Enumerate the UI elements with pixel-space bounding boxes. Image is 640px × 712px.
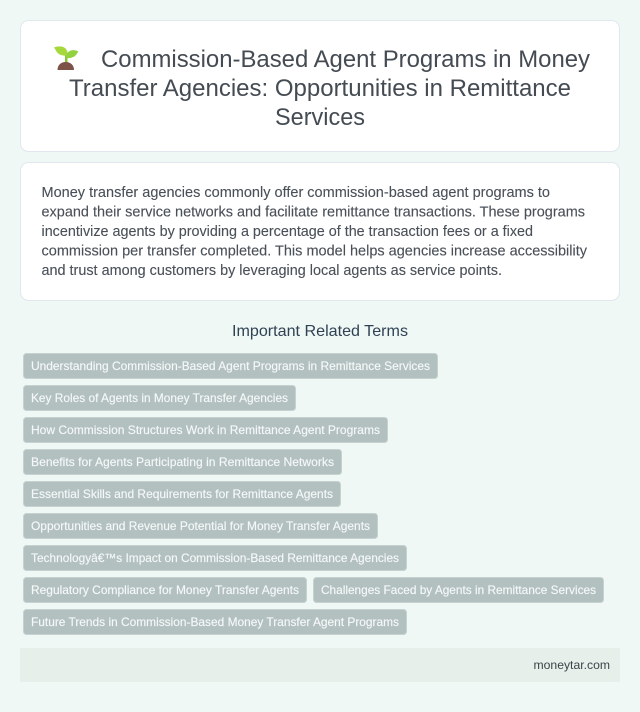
title: Transfer Agencies: Opportunities in Remittance — [69, 75, 571, 102]
tag 4 — [24, 450, 342, 474]
tag 1 — [24, 354, 438, 378]
tag 3 — [24, 418, 388, 442]
panel: title card — [20, 20, 620, 152]
text block: description: Money transfer agencies commonly offer commission-based agent programs to — [42, 184, 550, 201]
icon: seedling — [54, 46, 78, 70]
tag 7: Technologyâ€™s Impact on Commission-Based Remittance Agencies — [31, 551, 399, 565]
panel: description — [20, 162, 620, 300]
text block: description — [42, 184, 587, 279]
text block: description: expand their service networks and facilitate remittance transactions. These programs — [42, 204, 585, 220]
tag 4: Benefits for Agents Participating in Remittance Networks — [31, 455, 334, 469]
tag list — [24, 354, 604, 634]
tag 10 — [24, 610, 406, 634]
title: Commission-Based Agent Programs in Money — [101, 46, 590, 73]
tag 8 — [24, 578, 306, 602]
tag 7 — [24, 546, 406, 570]
text block: description: and trust among customers by leveraging local agents as service points. — [42, 262, 502, 279]
heading: related terms: Important Related Terms — [232, 323, 408, 340]
tag 1: Understanding Commission-Based Agent Programs in Remittance Services — [31, 359, 430, 373]
text block: description: incentivize agents by providing a percentage of the transaction fees or a fixed — [42, 223, 533, 240]
tag 3: How Commission Structures Work in Remittance Agent Programs — [31, 423, 380, 437]
tag 5: Essential Skills and Requirements for Remittance Agents — [31, 487, 333, 501]
tag 9 — [314, 578, 604, 602]
footer — [20, 648, 620, 682]
tag 2: Key Roles of Agents in Money Transfer Agencies — [31, 391, 288, 405]
tag 5 — [24, 482, 340, 506]
tag 10: Future Trends in Commission-Based Money Transfer Agent Programs — [31, 615, 399, 629]
tag 6 — [24, 514, 378, 538]
title — [69, 46, 590, 131]
tag 2 — [24, 386, 296, 410]
title: Services — [275, 104, 365, 131]
tag 8: Regulatory Compliance for Money Transfer Agents — [31, 583, 299, 597]
text block: description: commission per transfer completed. This model helps agencies increase accessibility — [42, 242, 587, 260]
tag 9: Challenges Faced by Agents in Remittance Services — [321, 583, 596, 597]
tag 6: Opportunities and Revenue Potential for Money Transfer Agents — [31, 519, 370, 533]
footer: moneytar.com — [534, 658, 610, 672]
